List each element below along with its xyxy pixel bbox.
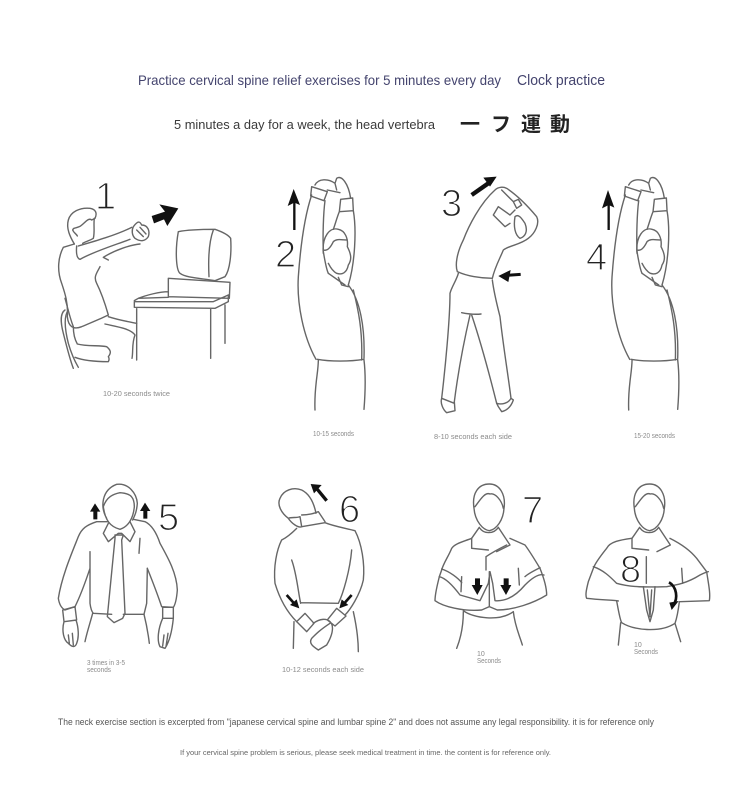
caption 4: 15-20 seconds [634, 433, 675, 440]
caption 8: Seconds [634, 649, 658, 656]
exercise 2: standing overhead stretch [275, 178, 365, 410]
disclaimer: The neck exercise section is excerpted from "japanese cervical spine and lumbar spine 2" and does not assume any legal responsibility. it is for reference only [58, 717, 654, 727]
caption 2: 10-15 seconds [313, 431, 354, 438]
caption 8: 10 [634, 642, 642, 649]
caption 5: seconds [87, 667, 111, 674]
caption 3: 8-10 seconds each side [434, 434, 512, 441]
subtitle: 運 [521, 113, 541, 136]
exercise 4: standing overhead stretch [586, 178, 679, 410]
caption 7: Seconds [477, 658, 501, 665]
caption 7 [477, 651, 501, 665]
exercise 3: side bend [441, 177, 538, 413]
subtitle: フ [491, 114, 511, 136]
caption 6: 10-12 seconds each side [282, 667, 364, 674]
exercise 8: wrist bend [586, 484, 710, 645]
caption 7: 10 [477, 651, 485, 658]
subtitle: 5 minutes a day for a week, the head vertebra [174, 117, 436, 132]
number 7: 7 [522, 490, 543, 532]
title: Clock practice [517, 73, 605, 89]
caption 1: 10-20 seconds twice [103, 391, 170, 398]
medical notice: If your cervical spine problem is serious, please seek medical treatment in time. the content is for reference only. [180, 748, 551, 757]
number 5: 5 [158, 497, 179, 539]
number 4: 4 [586, 237, 607, 279]
exercise 1: seated arm stretch at computer [59, 176, 231, 368]
exercise 7: palms pressed together [435, 484, 547, 648]
caption 8 [634, 642, 658, 656]
caption 5 [87, 660, 125, 674]
exercise 6: neck bend with hands behind back [275, 484, 364, 652]
number 8: 8 [620, 549, 641, 591]
exercise 5: shoulder shrug [58, 484, 179, 648]
subtitle [174, 113, 570, 136]
number 3: 3 [441, 183, 462, 225]
subtitle: 動 [550, 113, 570, 136]
caption 5: 3 times in 3-5 [87, 660, 125, 667]
number 2: 2 [275, 234, 296, 276]
number 1: 1 [95, 176, 116, 218]
subtitle: 一 [460, 114, 480, 136]
number 6: 6 [339, 489, 360, 531]
title: Practice cervical spine relief exercises for 5 minutes every day [138, 72, 501, 88]
